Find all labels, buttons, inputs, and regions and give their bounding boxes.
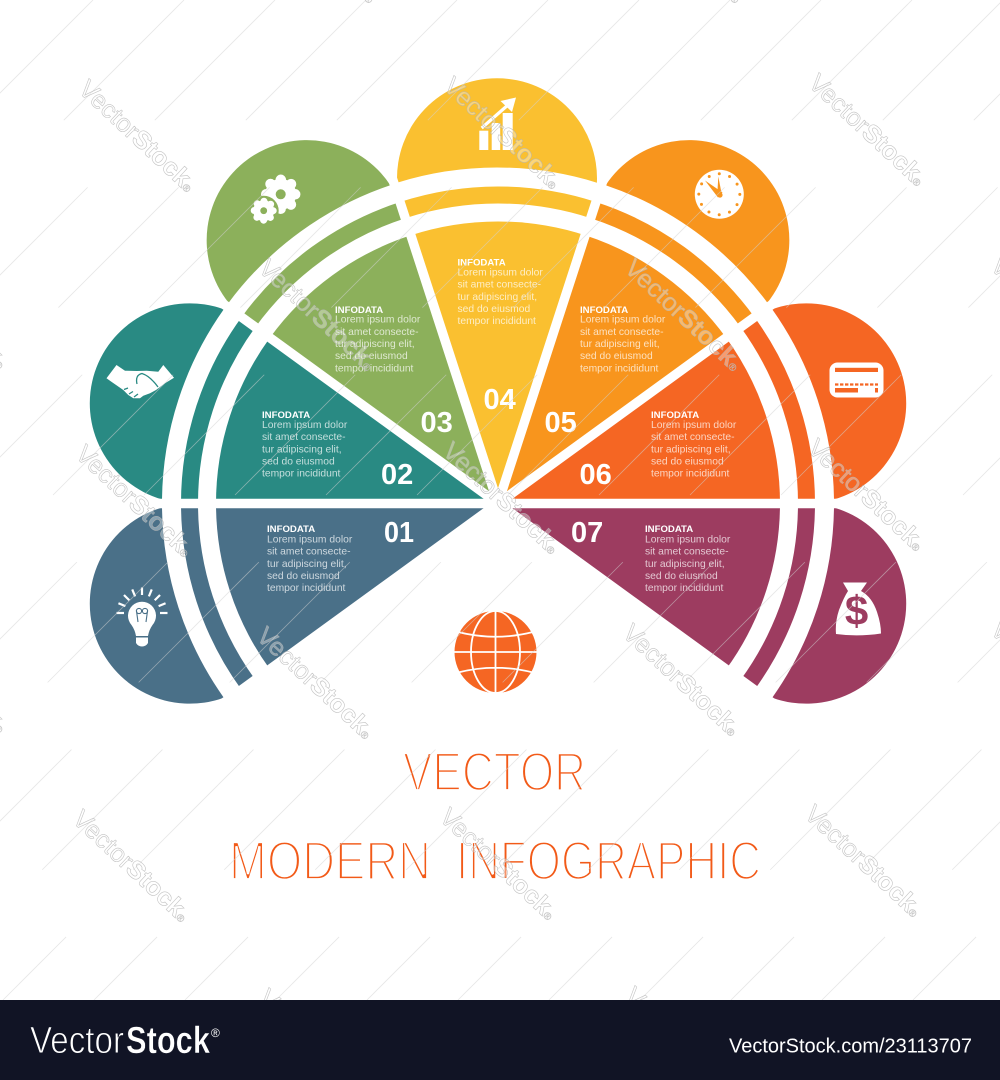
panel: segment 01 blue <box>90 504 498 704</box>
text: segment 01: tur adipiscing elit, <box>267 559 347 570</box>
icon: money bag <box>836 582 881 635</box>
wedge 05 <box>498 235 726 504</box>
number 03: 03 <box>420 407 453 439</box>
wedge 02 <box>216 338 498 504</box>
text: segment 07: sit amet consecte- <box>645 547 729 558</box>
text: segment 01: INFODATA <box>267 524 315 535</box>
footer logo: Vector <box>30 1020 124 1062</box>
text: segment 02: sit amet consecte- <box>262 432 346 443</box>
wedge 01 <box>216 504 498 669</box>
icon: credit card <box>830 362 884 398</box>
band 01 <box>181 504 255 690</box>
text: segment 06: tempor incididunt <box>651 469 730 480</box>
text: segment 04: tempor incididunt <box>458 316 536 327</box>
icon: clock <box>695 170 744 219</box>
watermarks: VectorStock® <box>438 72 567 195</box>
number 06: 06 <box>580 459 612 491</box>
text: segment 05: sit amet consecte- <box>580 327 664 338</box>
icon: handshake <box>106 365 174 398</box>
text: segment 07: Lorem ipsum dolor <box>645 534 731 546</box>
text: segment 07: tur adipiscing elit, <box>645 559 725 570</box>
text: segment 02: tur adipiscing elit, <box>262 444 342 455</box>
band 03 <box>242 202 405 327</box>
petal 05 <box>606 140 789 303</box>
text: segment 07: tempor incididunt <box>645 583 724 594</box>
watermarks: VectorStock® <box>73 75 202 198</box>
icon: light bulb <box>116 588 168 646</box>
wedge 03 <box>270 235 498 504</box>
band 02 <box>181 317 255 504</box>
text: segment 03: sed do eiusmod <box>335 351 408 362</box>
petal 04 <box>397 78 597 183</box>
footer logo: ® <box>211 1026 220 1040</box>
panel: segment 05 orange <box>498 140 789 503</box>
text: segment 06: INFODATA <box>651 410 699 421</box>
title: MODERN INFOGRAPHIC: INFOGRAPHIC <box>456 830 761 892</box>
number 04: 04 <box>484 384 516 416</box>
title: MODERN INFOGRAPHIC <box>229 830 761 892</box>
petal 01 <box>90 508 224 704</box>
watermarks: VectorStock® <box>70 440 199 563</box>
icon: growth chart <box>479 98 516 150</box>
text: segment 04: Lorem ipsum dolor <box>458 268 543 278</box>
watermarks: VectorStock® <box>251 622 380 745</box>
text: segment 05: tempor incididunt <box>580 363 659 374</box>
text: segment 03: tempor incididunt <box>335 363 414 374</box>
petal 06 <box>772 303 906 499</box>
title: VECTOR: VECTOR <box>403 740 586 802</box>
watermarks: VectorStock® <box>802 434 931 557</box>
watermarks: VectorStock® <box>253 254 382 377</box>
text: segment 05: tur adipiscing elit, <box>580 339 660 350</box>
panel: segment 06 red-orange <box>498 303 906 504</box>
panel: segment 03 green <box>207 140 498 503</box>
text: segment 01: sed do eiusmod <box>267 571 340 582</box>
text: segment 01: sit amet consecte- <box>267 547 351 558</box>
footer url: VectorStock.com/23113707 <box>729 1036 972 1058</box>
text: segment 03: tur adipiscing elit, <box>335 339 415 350</box>
text: segment 05: Lorem ipsum dolor <box>580 315 666 326</box>
petal 03 <box>207 140 390 303</box>
icon: globe <box>454 611 536 693</box>
text: segment 03: Lorem ipsum dolor <box>335 315 421 326</box>
icon: money bag: $ <box>845 587 868 634</box>
panel: segment 07 plum <box>498 504 906 704</box>
watermarks: VectorStock® <box>617 619 746 742</box>
text: segment 02: sed do eiusmod <box>262 456 335 468</box>
wedge 04 <box>411 222 585 504</box>
watermarks: VectorStock® <box>619 254 748 377</box>
band 07 <box>741 504 815 690</box>
text: segment 06: Lorem ipsum dolor <box>651 420 737 431</box>
text: segment 07: INFODATA <box>645 524 693 535</box>
text: segment 04: INFODATA <box>458 258 506 268</box>
panel: segment 04 yellow <box>397 78 597 504</box>
title: MODERN INFOGRAPHIC: MODERN <box>229 830 431 892</box>
text: segment 04: tur adipiscing elit, <box>458 292 537 303</box>
text: segment 06: sed do eiusmod <box>651 456 724 468</box>
text: segment 07: sed do eiusmod <box>645 571 718 582</box>
band 04 <box>400 186 596 218</box>
watermarks: VectorStock® <box>803 69 932 192</box>
text: segment 01: tempor incididunt <box>267 583 346 594</box>
number 05: 05 <box>544 407 577 439</box>
text: segment 02: tempor incididunt <box>262 469 341 480</box>
wedge 07 <box>498 504 780 669</box>
petal 07 <box>772 508 906 704</box>
watermarks: VectorStock® <box>799 800 928 923</box>
icon: gears <box>249 179 296 226</box>
band 06 <box>741 317 815 504</box>
wedge 06 <box>498 338 780 504</box>
text: segment 04: sit amet consecte- <box>458 280 541 291</box>
footer logo <box>30 1020 220 1062</box>
band 05 <box>591 202 754 327</box>
watermarks: VectorStock® <box>67 805 196 928</box>
petal 02 <box>90 303 224 499</box>
text: segment 05: INFODATA <box>580 305 628 316</box>
text: segment 04: sed do eiusmod <box>458 304 530 315</box>
text: segment 02: INFODATA <box>262 410 310 421</box>
footer logo: Stock <box>126 1020 211 1062</box>
text: segment 06: tur adipiscing elit, <box>651 444 731 455</box>
footer bar <box>0 1000 1000 1080</box>
watermarks: VectorStock® <box>434 803 563 926</box>
panel: segment 02 teal <box>90 303 498 504</box>
number 07: 07 <box>571 517 603 549</box>
watermarks: VectorStock® <box>437 437 566 560</box>
text: segment 01: Lorem ipsum dolor <box>267 534 353 546</box>
text: segment 03: INFODATA <box>335 305 383 316</box>
text: segment 05: sed do eiusmod <box>580 351 653 362</box>
number 01: 01 <box>384 517 414 549</box>
text: segment 02: Lorem ipsum dolor <box>262 420 348 431</box>
number 02: 02 <box>381 459 413 491</box>
text: segment 06: sit amet consecte- <box>651 432 735 443</box>
text: segment 03: sit amet consecte- <box>335 327 419 338</box>
